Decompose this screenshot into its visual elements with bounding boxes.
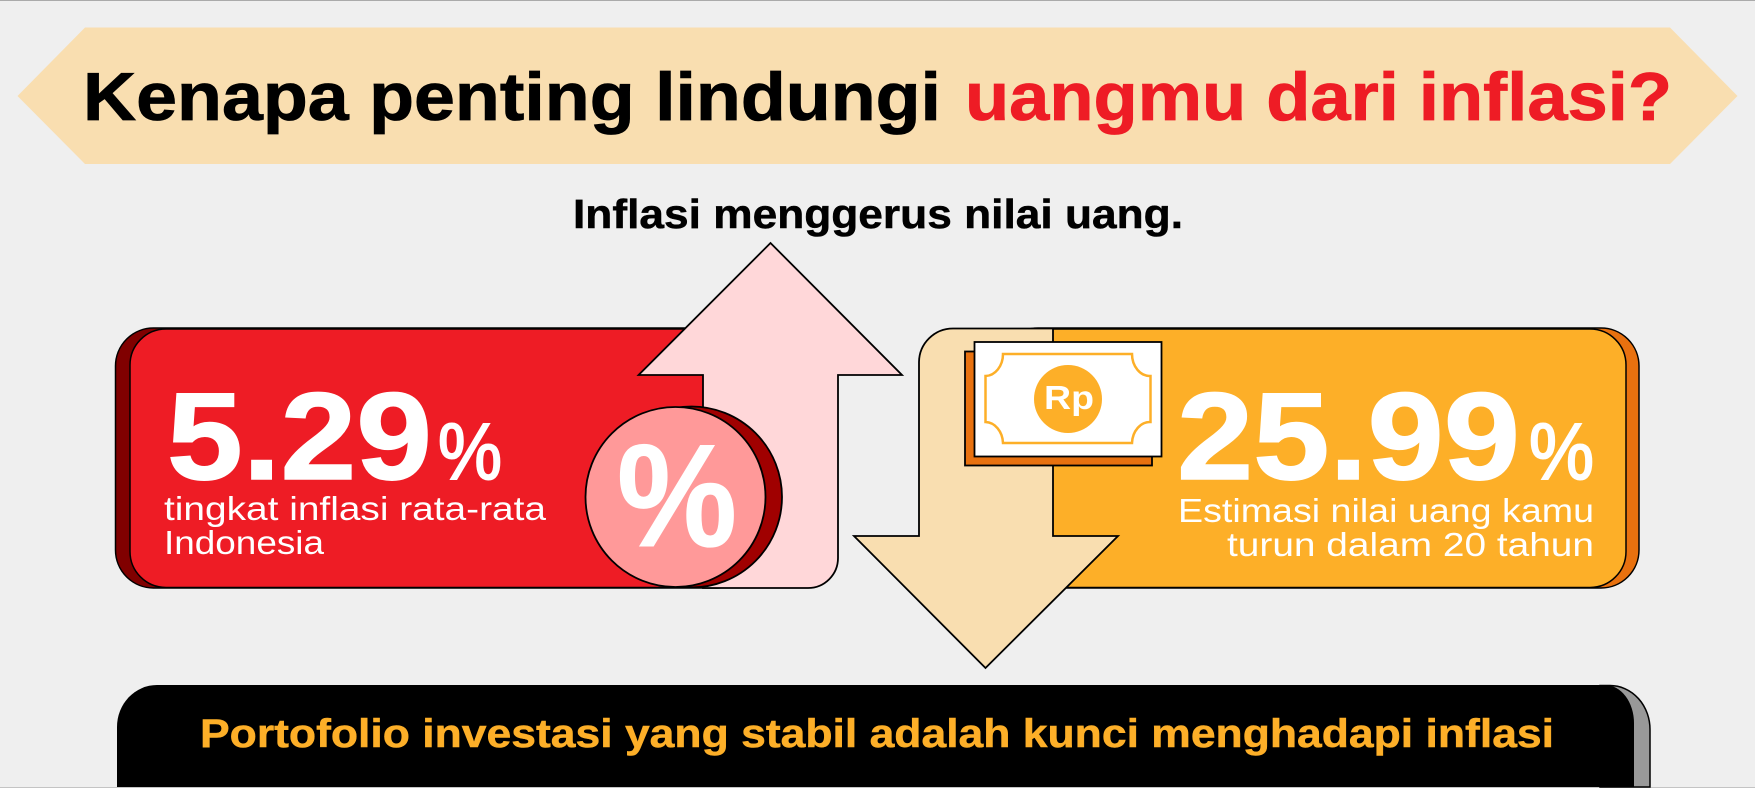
stat: 5.29%: 5.29 [167,368,432,506]
title banner [18,28,1738,164]
stat: 25.99%: 25.99 [1177,368,1520,506]
arrow: up [639,243,902,588]
panel heading: Portofolio investasi yang stabil adalah kunci menghadapi inflasi [200,712,1554,756]
arrow: down [854,328,1118,668]
stat description [1178,492,1594,563]
panel: inflation rate [116,243,902,588]
panel: stable portfolio [117,685,1650,787]
stat description: tingkat inflasi rata-rata [164,490,547,527]
title: uangmu dari inflasi? [965,59,1672,135]
stat description [164,490,547,561]
icon: rupiah banknote [965,342,1162,466]
stat: 5.29%: % [438,407,502,496]
stat description: Indonesia [164,524,325,561]
stat: 25.99%: % [1529,407,1594,496]
title: Kenapa penting lindungi [83,59,941,135]
subheading: Inflasi menggerus nilai uang. [573,191,1183,237]
panel: value loss [854,328,1639,668]
icon: percent coin: % [617,414,737,577]
icon: rupiah banknote: Rp [1044,379,1094,416]
stat description: turun dalam 20 tahun [1227,526,1594,563]
title [83,59,1672,135]
icon: percent coin [586,406,782,588]
stat description: Estimasi nilai uang kamu [1178,492,1594,529]
